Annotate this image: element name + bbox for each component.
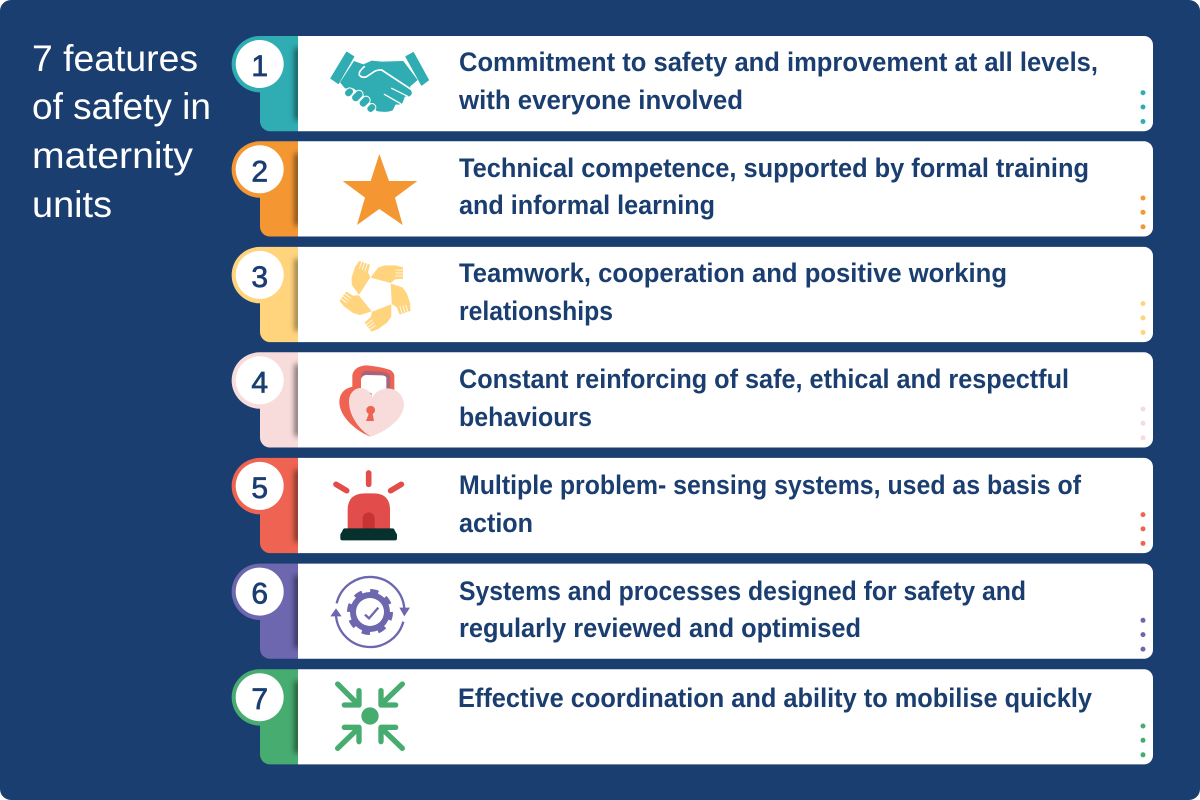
- text 1: with everyone involved: [458, 85, 743, 115]
- dots 7: [1140, 724, 1146, 757]
- number tab 6: 6: [251, 578, 268, 611]
- icon: heart padlock: [339, 365, 404, 437]
- number tab 3: [232, 247, 1153, 342]
- text 1: [458, 47, 1098, 115]
- text 2: [459, 153, 1089, 220]
- text 6: regularly reviewed and optimised: [459, 613, 861, 643]
- row 7: coordination: [232, 669, 1153, 764]
- text 2: and informal learning: [459, 190, 715, 220]
- row 2: competence: [232, 141, 1153, 236]
- row 5: problem sensing: [232, 458, 1153, 553]
- title: 7 features: [32, 38, 198, 79]
- dots 1: [1140, 90, 1146, 124]
- number tab 1: [232, 36, 1153, 131]
- text 5: action: [459, 508, 533, 538]
- icon: converging arrows: [338, 684, 402, 748]
- number tab 7: 7: [251, 683, 268, 716]
- number tab 5: 5: [251, 472, 268, 505]
- number tab 7: [232, 669, 1153, 764]
- dots 3: [1140, 301, 1146, 335]
- text 6: Systems and processes designed for safety and: [459, 576, 1026, 606]
- dots 4: [1140, 406, 1146, 440]
- number tab 2: 2: [251, 155, 268, 188]
- icon: gear with arrows: [330, 577, 410, 647]
- text 1: Commitment to safety and improvement at all levels,: [459, 47, 1098, 77]
- number tab 4: [232, 352, 1153, 448]
- dots 2: [1140, 196, 1146, 229]
- title: of safety in: [32, 86, 211, 127]
- text 6: [459, 576, 1026, 643]
- number tab 5: [232, 458, 1153, 553]
- icon: star: [343, 154, 417, 225]
- row 4: behaviours: [232, 352, 1153, 448]
- title: [32, 38, 211, 225]
- text 5: Multiple problem- sensing systems, used as basis of: [459, 470, 1081, 500]
- row 1: commitment: [232, 36, 1153, 131]
- icon: five hands: [338, 260, 413, 334]
- text 4: Constant reinforcing of safe, ethical and respectful: [459, 364, 1069, 394]
- text 7: Effective coordination and ability to mobilise quickly: [458, 683, 1092, 713]
- title: maternity: [32, 135, 194, 176]
- text 3: [459, 258, 1007, 326]
- text 5: [459, 470, 1081, 538]
- number tab 2: [232, 141, 1153, 236]
- icon: handshake: [331, 52, 428, 114]
- number tab 6: [232, 564, 1153, 659]
- number tab 4: 4: [251, 366, 268, 399]
- row 6: systems: [232, 564, 1153, 659]
- text 3: relationships: [459, 296, 613, 326]
- text 4: [459, 364, 1069, 432]
- row 3: teamwork: [232, 247, 1153, 342]
- title: units: [32, 184, 112, 225]
- dots 6: [1140, 618, 1146, 652]
- text 4: behaviours: [459, 402, 592, 432]
- icon: siren: [336, 473, 401, 540]
- number tab 1: 1: [251, 50, 268, 83]
- text 3: Teamwork, cooperation and positive working: [459, 258, 1007, 288]
- number tab 3: 3: [251, 261, 268, 294]
- dots 5: [1140, 512, 1146, 546]
- text 2: Technical competence, supported by formal training: [459, 153, 1089, 183]
